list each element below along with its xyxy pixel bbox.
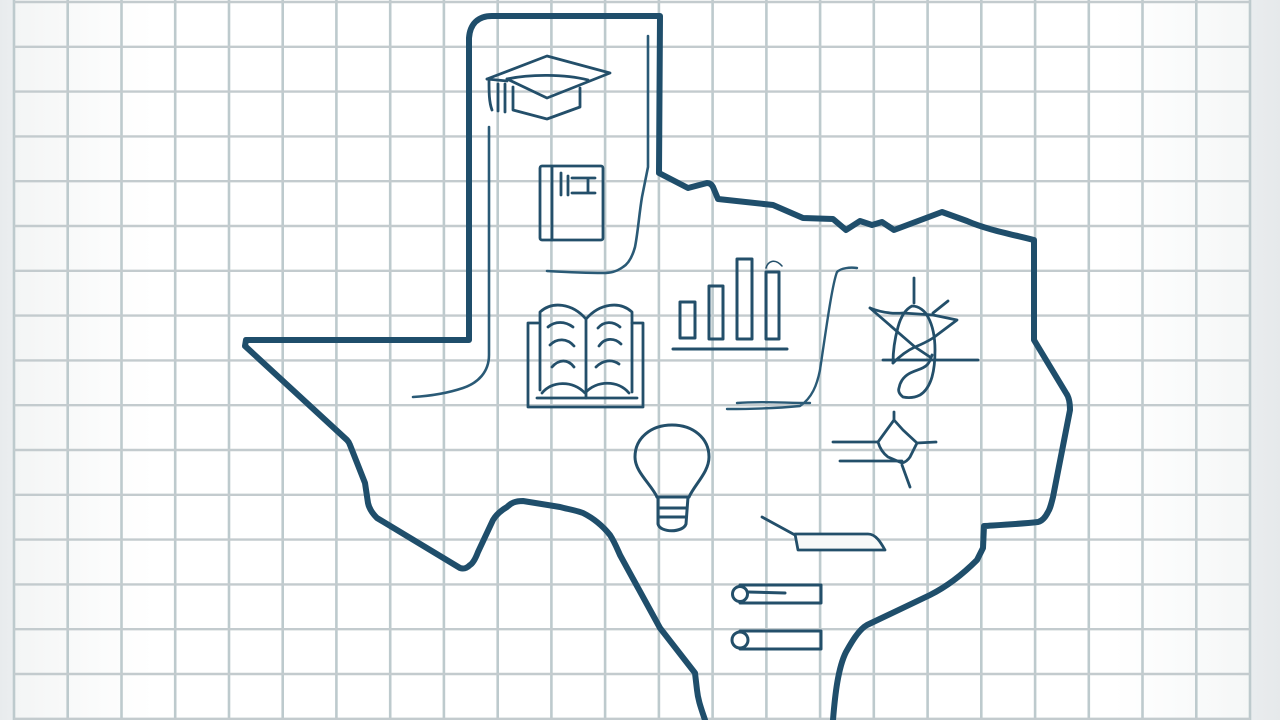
inner contour: central right bbox=[727, 268, 857, 409]
inner contour: panhandle left bbox=[413, 127, 489, 397]
icon: graduation cap bbox=[487, 56, 610, 119]
icon: light bulb bbox=[635, 425, 709, 531]
Texas state outline bbox=[245, 16, 1070, 720]
icon: open book bbox=[528, 305, 643, 407]
icon: bar chart bbox=[673, 259, 787, 349]
icon: pencil shape bbox=[762, 517, 885, 550]
icon: lower scroll bar bbox=[732, 631, 821, 649]
icon: notebook bbox=[540, 166, 603, 240]
icon: upper scroll bar bbox=[732, 585, 821, 603]
icon: circuit node bbox=[833, 412, 936, 487]
icon: star and scribble bbox=[870, 278, 978, 398]
inner contour: panhandle right bbox=[547, 36, 648, 273]
